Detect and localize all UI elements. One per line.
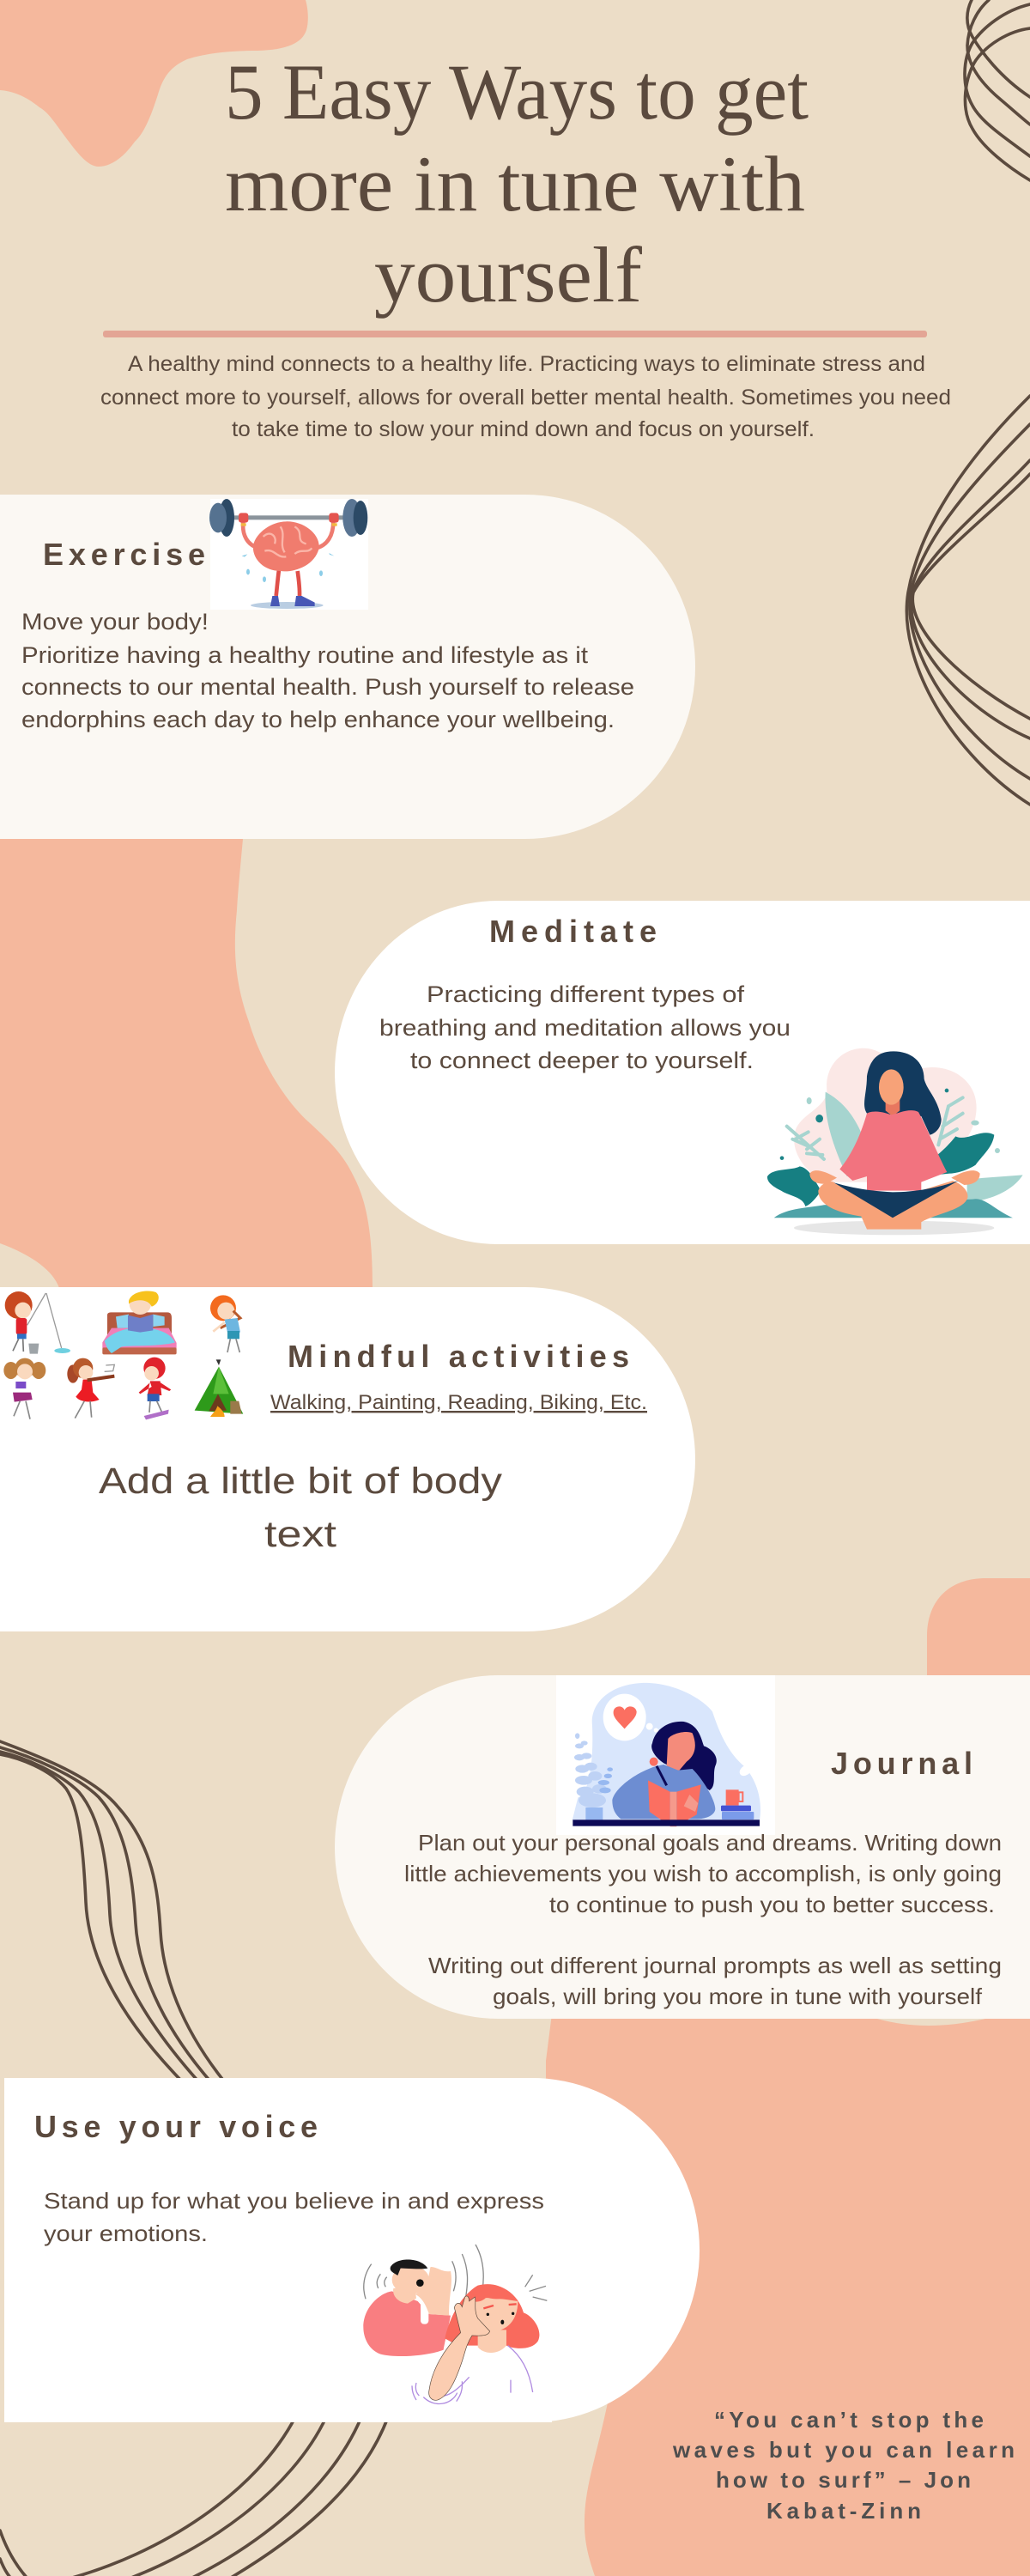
icon: woman journaling <box>556 1675 775 1835</box>
body text: exercise <box>21 609 634 732</box>
panel: use your voice <box>4 2078 700 2422</box>
body text: use your voice: your emotions. <box>44 2221 208 2246</box>
quote: “You can’t stop the <box>714 2407 984 2433</box>
heading: mindful activities: Mindful activities <box>288 1339 629 1374</box>
icon: brain lifting barbell <box>209 499 368 610</box>
quote <box>672 2407 1015 2524</box>
subheading: activities list: Walking, Painting, Reading, Biking, Etc. <box>270 1391 647 1414</box>
body text: meditate <box>379 981 791 1073</box>
panel: journal <box>335 1675 1030 2019</box>
heading: journal: Journal <box>831 1746 972 1781</box>
background blob: bottom right <box>546 2014 1030 2576</box>
title <box>225 48 809 319</box>
body text: journal: goals, will bring you more in tune with yourself <box>493 1984 983 2009</box>
icon: person shouting to listening person <box>363 2245 547 2403</box>
intro text: to take time to slow your mind down and focus on yourself. <box>232 417 815 441</box>
quote: how to surf” – Jon <box>716 2467 971 2493</box>
icon: cartoon kids doing activities <box>3 1291 243 1419</box>
background blob: top left <box>0 0 308 167</box>
intro text: connect more to yourself, allows for overall better mental health. Sometimes you need <box>100 386 951 410</box>
title underline <box>103 331 927 337</box>
body text: journal: to continue to push you to better success. <box>549 1892 995 1917</box>
panel: meditate <box>335 901 1030 1244</box>
panel: exercise <box>0 495 695 839</box>
body text: use your voice: Stand up for what you believe in and express <box>44 2188 544 2214</box>
body text: journal: Plan out your personal goals and dreams. Writing down <box>418 1830 1002 1856</box>
title: 5 Easy Ways to get <box>225 48 809 136</box>
body text: use your voice <box>44 2188 544 2246</box>
icon: meditating woman <box>767 1048 1023 1235</box>
body text: journal: little achievements you wish to accomplish, is only going <box>404 1861 1002 1886</box>
panel: mindful activities <box>0 1287 695 1631</box>
heading: use your voice: Use your voice <box>34 2109 318 2144</box>
intro text <box>100 352 951 441</box>
body text: meditate: Practicing different types of <box>427 981 745 1007</box>
intro text: A healthy mind connects to a healthy life. Practicing ways to eliminate stress and <box>128 352 925 376</box>
background blob: right small <box>927 1578 1030 1683</box>
body text: exercise: connects to our mental health. Push yourself to release <box>21 674 634 700</box>
background blob: left middle <box>0 839 373 1288</box>
title: yourself <box>374 231 642 319</box>
body text: placeholder <box>99 1461 503 1555</box>
quote: waves but you can learn <box>672 2437 1015 2463</box>
body text: meditate: to connect deeper to yourself. <box>410 1048 754 1073</box>
heading: exercise: Exercise <box>43 537 205 572</box>
body text: exercise: Move your body! <box>21 609 209 635</box>
body text: placeholder: Add a little bit of body <box>99 1461 503 1502</box>
quote: Kabat-Zinn <box>766 2498 921 2524</box>
body text: journal: Writing out different journal prompts as well as setting <box>428 1953 1002 1978</box>
body text: journal <box>404 1830 1002 2009</box>
title: more in tune with <box>225 140 805 228</box>
body text: placeholder: text <box>264 1514 336 1555</box>
body text: exercise: Prioritize having a healthy routine and lifestyle as it <box>21 642 589 668</box>
body text: meditate: breathing and meditation allows you <box>379 1015 791 1041</box>
heading: meditate: Meditate <box>489 914 657 949</box>
body text: exercise: endorphins each day to help enhance your wellbeing. <box>21 707 615 732</box>
